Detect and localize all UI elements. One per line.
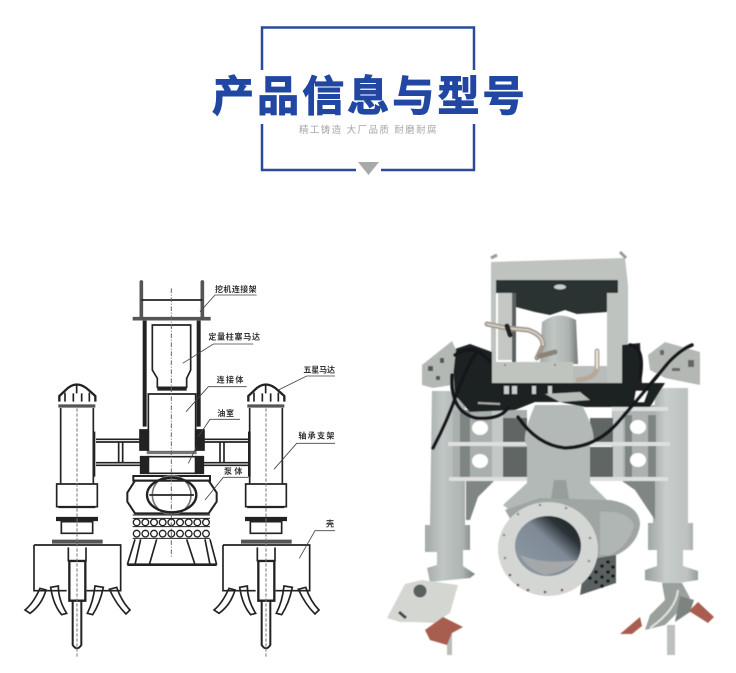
hoses xyxy=(433,345,692,448)
motor cylinder xyxy=(540,315,578,364)
right motor head xyxy=(648,342,700,385)
triangle marker xyxy=(358,162,379,175)
part labels: 油室 xyxy=(217,408,234,418)
left cutter xyxy=(387,580,463,655)
hydraulic pipes xyxy=(487,324,597,380)
left leg xyxy=(425,391,475,582)
inlet flange xyxy=(498,502,598,596)
part labels: 壳 xyxy=(326,519,334,529)
valve block xyxy=(492,362,573,383)
product photo xyxy=(387,252,714,655)
part labels: 连接体 xyxy=(217,375,243,385)
brackets xyxy=(448,405,670,520)
right cutter xyxy=(620,583,714,655)
title: 产品信息与型号 xyxy=(212,73,528,120)
part labels xyxy=(208,284,335,529)
part labels: 五星马达 xyxy=(303,365,335,375)
left cutter motor assembly xyxy=(25,384,130,657)
leader lines xyxy=(183,295,335,558)
right cutter motor assembly xyxy=(214,384,319,657)
part labels: 轴承支架 xyxy=(298,430,334,440)
pump neck xyxy=(503,405,612,512)
side arms xyxy=(94,432,249,477)
pump volute xyxy=(505,498,640,570)
center column xyxy=(133,282,211,473)
left motor head xyxy=(422,341,456,388)
dark manifold xyxy=(452,343,665,412)
lower valve housing xyxy=(573,366,607,387)
right leg xyxy=(645,388,698,584)
pump body xyxy=(127,476,217,565)
part labels: 挖机连接架 xyxy=(215,284,257,294)
top frame xyxy=(491,252,628,387)
part labels: 泵体 xyxy=(224,466,242,476)
part labels: 定量柱塞马达 xyxy=(208,331,260,341)
technical line drawing xyxy=(25,282,335,657)
strainer xyxy=(580,555,616,595)
heading frame xyxy=(262,28,474,170)
subtitle: 精工铸造 大厂品质 耐磨耐腐 xyxy=(299,124,438,136)
centre line xyxy=(170,288,173,557)
